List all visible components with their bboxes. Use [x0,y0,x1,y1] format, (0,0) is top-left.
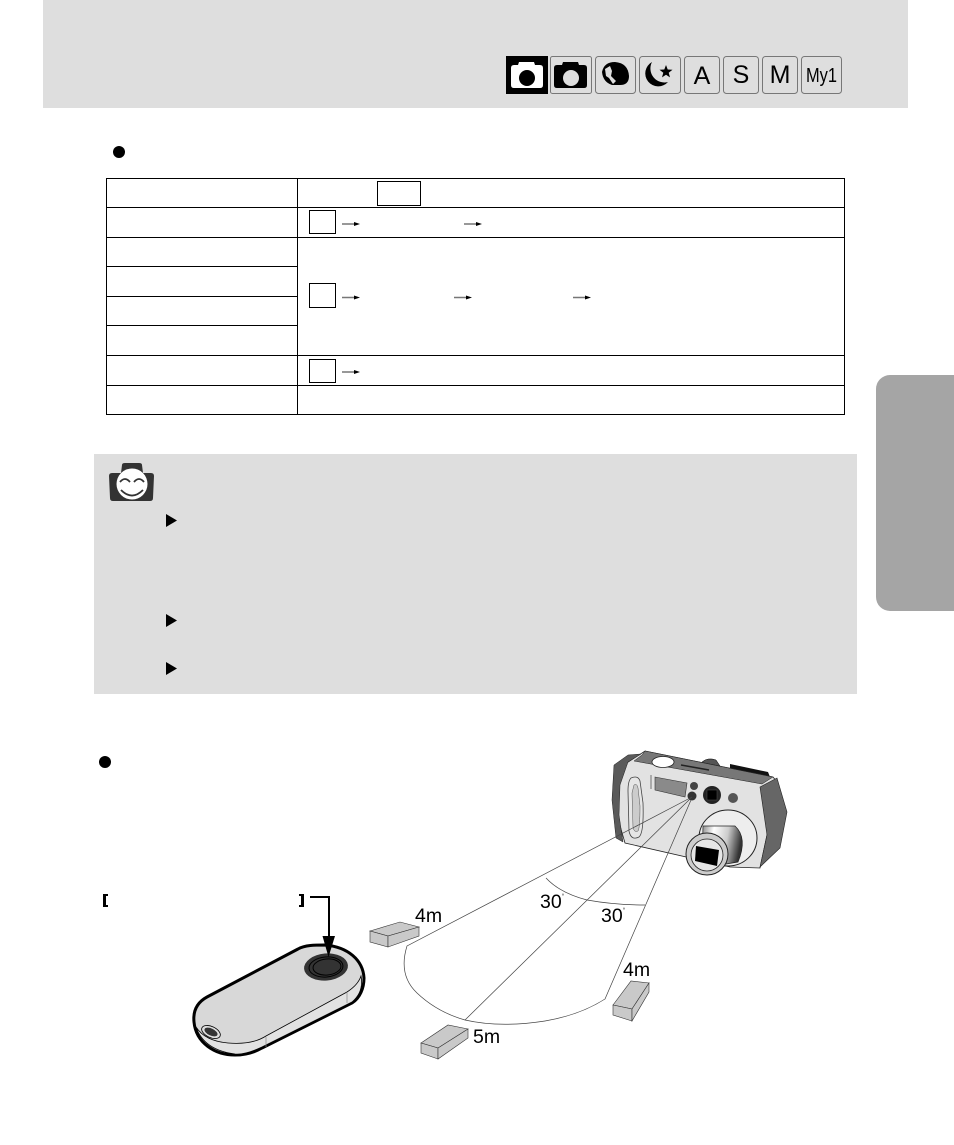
shutter button [303,952,349,982]
header band [43,0,908,108]
transmitter window [200,1023,222,1041]
camera [612,751,787,875]
label: right angle: 30 [601,905,623,927]
distance box: right 4m [613,981,649,1021]
info panel [94,454,857,694]
table arrows [342,222,591,374]
side tab [876,375,954,611]
bullet: remote range heading [99,756,111,768]
mode icon: night scene [640,56,680,94]
remote caption brackets [103,894,304,907]
mode icon: A [684,56,720,94]
note marker 3 [166,662,177,675]
mode icon: portrait [596,56,636,94]
mode icon: S: S [733,61,749,89]
label: left angle: ° [562,894,565,900]
mode icon: program [550,56,592,94]
mode icon: My1 [802,56,842,94]
label: left 4m: 4m [415,905,442,927]
note marker 1 [166,514,177,527]
icon: smiling camera [109,463,154,501]
range diagram [404,797,692,1024]
key box: menu row 7 [310,360,336,382]
mode icon: A: A [694,62,711,90]
label: right angle: ° [623,908,626,914]
key box: menu row 2 [310,210,336,234]
note marker 2 [166,614,177,627]
key box: shutter [378,182,420,206]
distance box: centre 5m [421,1025,468,1059]
mode icon: M: M [770,61,790,89]
bullet: table heading [113,146,125,158]
mode icon: M [762,56,798,94]
key box: menu rows 3-6 [310,284,336,308]
arrow: to shutter button [310,897,335,957]
settings table [106,178,844,414]
label: centre 5m: 5m [473,1026,500,1048]
mode icon: S [724,56,758,94]
label: right 4m: 4m [623,959,650,981]
mode icon: auto (selected) [506,56,548,94]
distance box: left 4m [370,922,419,947]
label: left angle: 30 [540,891,562,913]
remote control [194,945,364,1055]
mode icon: My1: My1 [806,65,837,87]
